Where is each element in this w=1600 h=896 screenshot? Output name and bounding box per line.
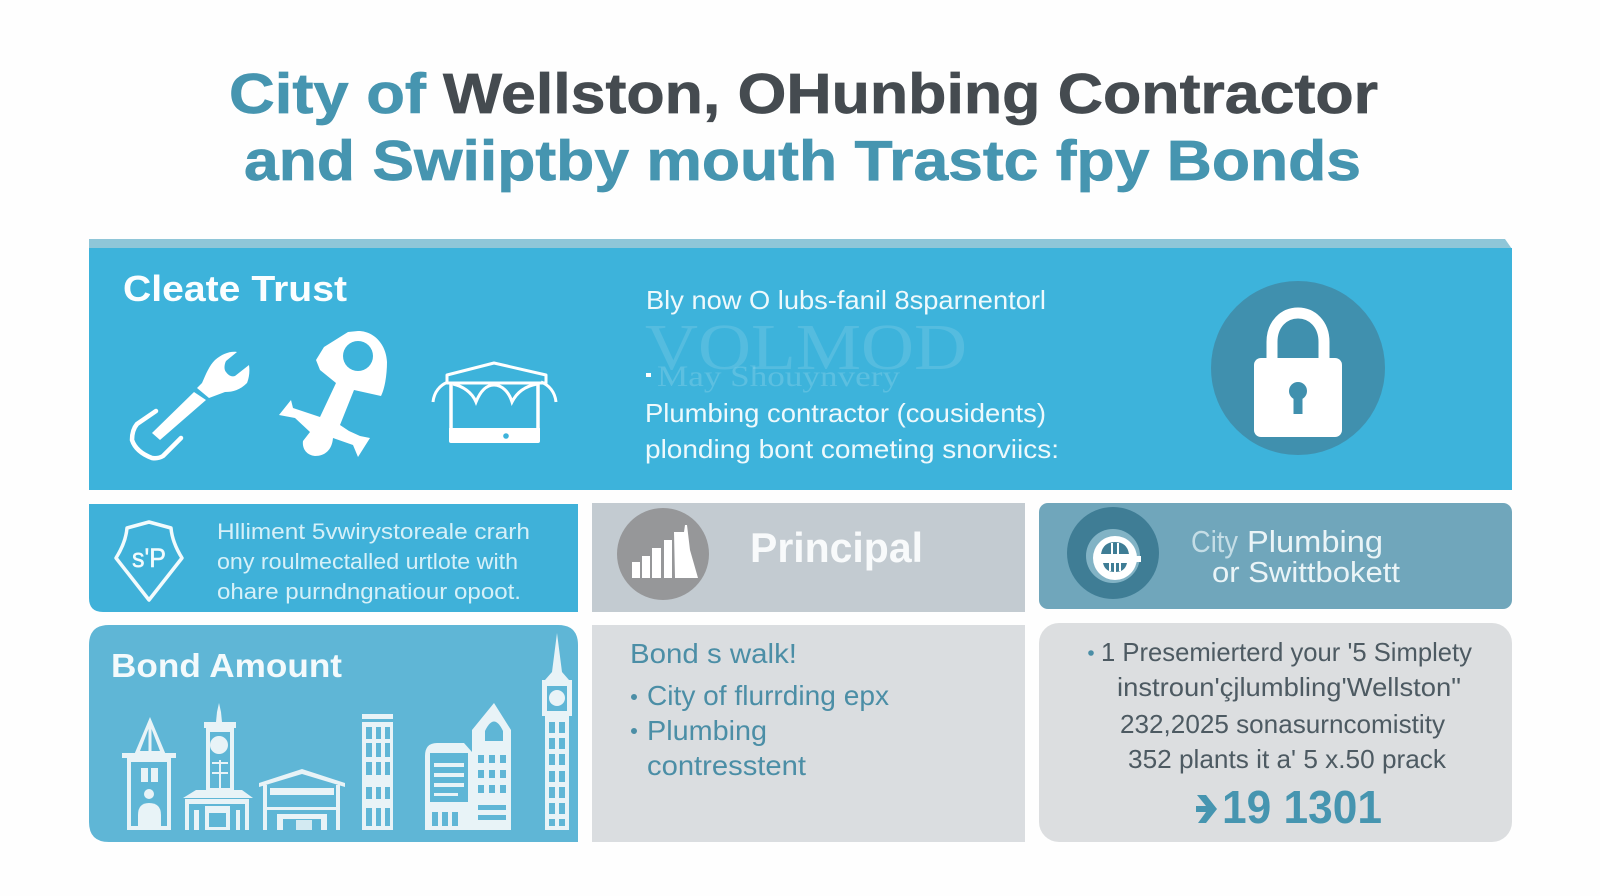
icon: shield: s'P [132, 543, 166, 573]
text block: bond walk list: Bond s walk! [630, 638, 797, 669]
panel: shield note [89, 504, 578, 612]
text block: trust description [645, 285, 1059, 464]
text block: trust description: VOLMOD [645, 311, 967, 384]
heading: create trust: Cleate Trust [123, 268, 347, 309]
icon: padlock [1211, 281, 1385, 455]
panel: create trust [89, 239, 1512, 490]
building: church [122, 717, 176, 830]
text block: shield note: ony roulmectalled urtlote with [217, 549, 518, 574]
text block: details: 352 plants it a' 5 x.50 prack [1128, 744, 1447, 774]
title: City of [229, 62, 427, 126]
building: offices [425, 703, 511, 830]
statistic: 19 1301: 19 1301 [1222, 781, 1382, 833]
text block: bond walk list: Plumbing [647, 715, 767, 746]
building: big ben [542, 633, 572, 830]
text block: trust description: Bly now O lubs-fanil 8sparnentorl [646, 285, 1046, 315]
text block: trust description: Plumbing contractor (cousidents) [645, 398, 1046, 428]
building: hall [259, 769, 345, 830]
text block: trust description: plonding bont cometing snorviics: [645, 434, 1059, 464]
icon: shield [116, 522, 182, 600]
icon: gear circle [1067, 507, 1159, 599]
text block: city plumbing: Plumbing [1247, 524, 1383, 559]
title: and Swiiptby mouth Trastc fpy Bonds [244, 129, 1361, 193]
title [229, 62, 1378, 193]
text block: details: 1 Presemierterd your '5 Simplety [1101, 637, 1472, 667]
icon: bar chart circle [617, 508, 709, 600]
text block: details [1088, 637, 1472, 774]
illustration: city skyline [122, 633, 572, 830]
text block: details: instroun'çjlumbling'Wellston" [1117, 672, 1461, 702]
building: clock tower [183, 703, 253, 830]
panel: bond amount [89, 625, 578, 842]
icon: wrench [132, 352, 249, 458]
panel: details [1039, 623, 1512, 842]
text block: shield note: Hlliment 5vwirystoreale crarh [217, 519, 530, 544]
panel: bond walk [592, 625, 1025, 842]
text block: trust description: May Shouynvery [657, 360, 900, 393]
text block: city plumbing [1191, 524, 1400, 589]
panel: city plumbing header [1039, 503, 1512, 609]
text block: city plumbing: City [1191, 524, 1238, 559]
panel: principal header [592, 503, 1025, 612]
title: Wellston, OHunbing Contractor [443, 62, 1378, 126]
text block: shield note: ohare purndngnatiour opoot. [217, 579, 521, 604]
text block: city plumbing: or Swittbokett [1212, 557, 1400, 589]
building: tower [362, 714, 393, 830]
heading: principal: Principal [750, 524, 923, 571]
icon: anchor key [279, 331, 387, 457]
icon: tablet house [433, 363, 556, 443]
text block: details: 232,2025 sonasurncomistity [1120, 709, 1445, 739]
heading: bond amount: Bond Amount [111, 647, 342, 684]
text block: bond walk list: City of flurrding epx [647, 680, 889, 711]
text block: bond walk list: contresstent [647, 750, 806, 781]
text block: shield note [217, 519, 530, 604]
text block: bond walk list [630, 638, 889, 781]
